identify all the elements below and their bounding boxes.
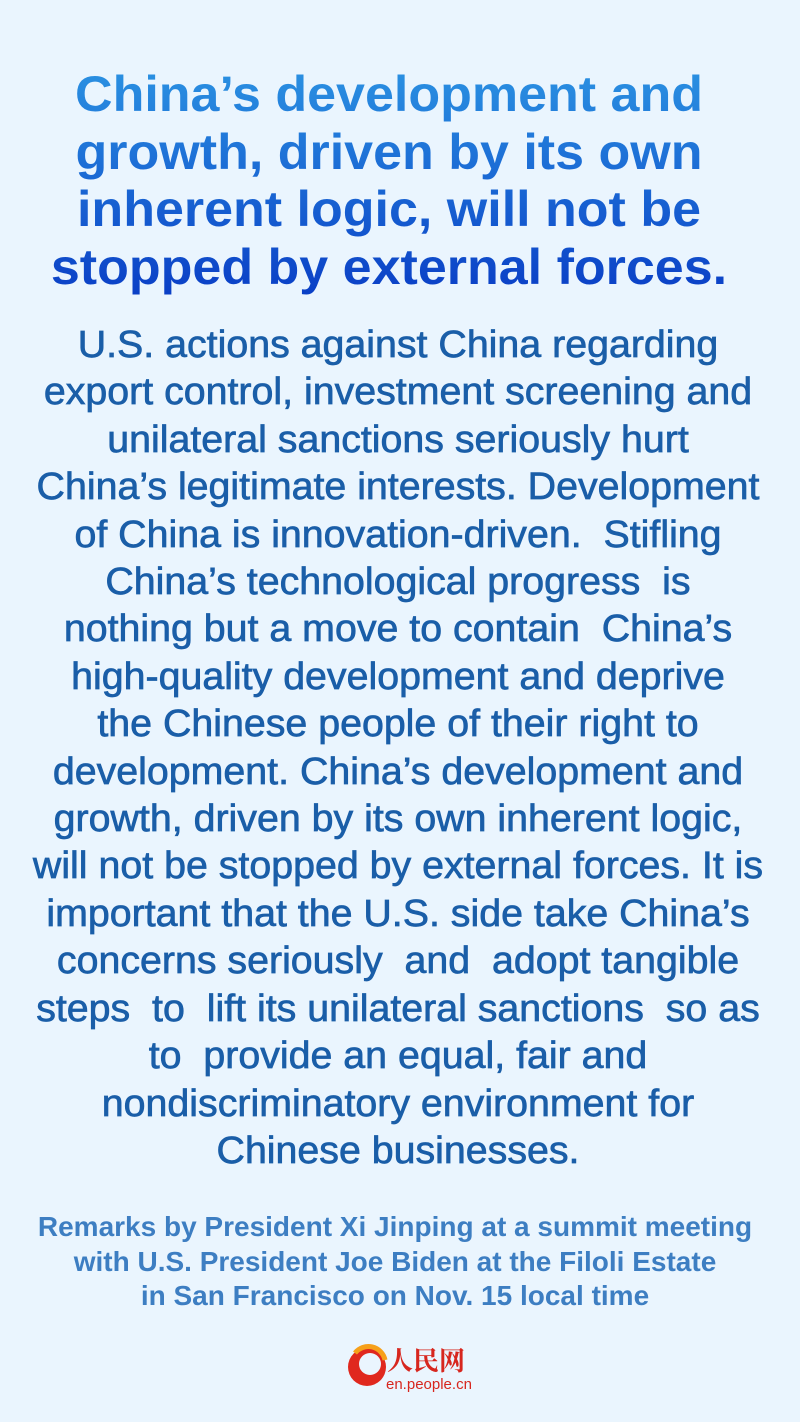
logo: people.cn: en.people.cn [386, 1376, 472, 1393]
body text: steps to lift its unilateral sanctions so as [36, 988, 760, 1030]
body text: U.S. actions against China regarding [78, 324, 718, 366]
body text: the Chinese people of their right to [97, 703, 699, 745]
body text: China’s legitimate interests. Development [37, 466, 759, 508]
credit: in San Francisco on Nov. 15 local time [141, 1280, 649, 1311]
body text: unilateral sanctions seriously hurt [107, 419, 689, 461]
title: China’s development and [75, 66, 703, 122]
body text: development. China’s development and [53, 751, 743, 793]
body text: high-quality development and deprive [71, 656, 725, 698]
body text: Chinese businesses. [217, 1130, 579, 1172]
body text: will not be stopped by external forces. It is [33, 845, 763, 887]
body text: concerns seriously and adopt tangible [57, 940, 739, 982]
body text: export control, investment screening and [44, 371, 752, 413]
title: stopped by external forces. [51, 238, 727, 294]
body text: nothing but a move to contain China’s [64, 608, 732, 650]
body text [32, 324, 763, 1172]
body text: to provide an equal, fair and [149, 1035, 647, 1077]
logo: people.cn [348, 1341, 472, 1393]
body text: nondiscriminatory environment for [102, 1082, 694, 1124]
body text: China’s technological progress is [105, 561, 691, 603]
body text: important that the U.S. side take China’s [46, 893, 750, 935]
credit: with U.S. President Joe Biden at the Filoli Estate [74, 1246, 716, 1276]
body text: growth, driven by its own inherent logic, [54, 798, 742, 840]
credit [38, 1211, 752, 1311]
title: growth, driven by its own [76, 124, 702, 180]
title: inherent logic, will not be [77, 181, 701, 237]
credit: Remarks by President Xi Jinping at a summit meeting [38, 1211, 752, 1242]
body text: of China is innovation-driven. Stifling [74, 514, 722, 556]
title [0, 66, 800, 296]
logo: people.cn: 人民网 [387, 1341, 465, 1378]
